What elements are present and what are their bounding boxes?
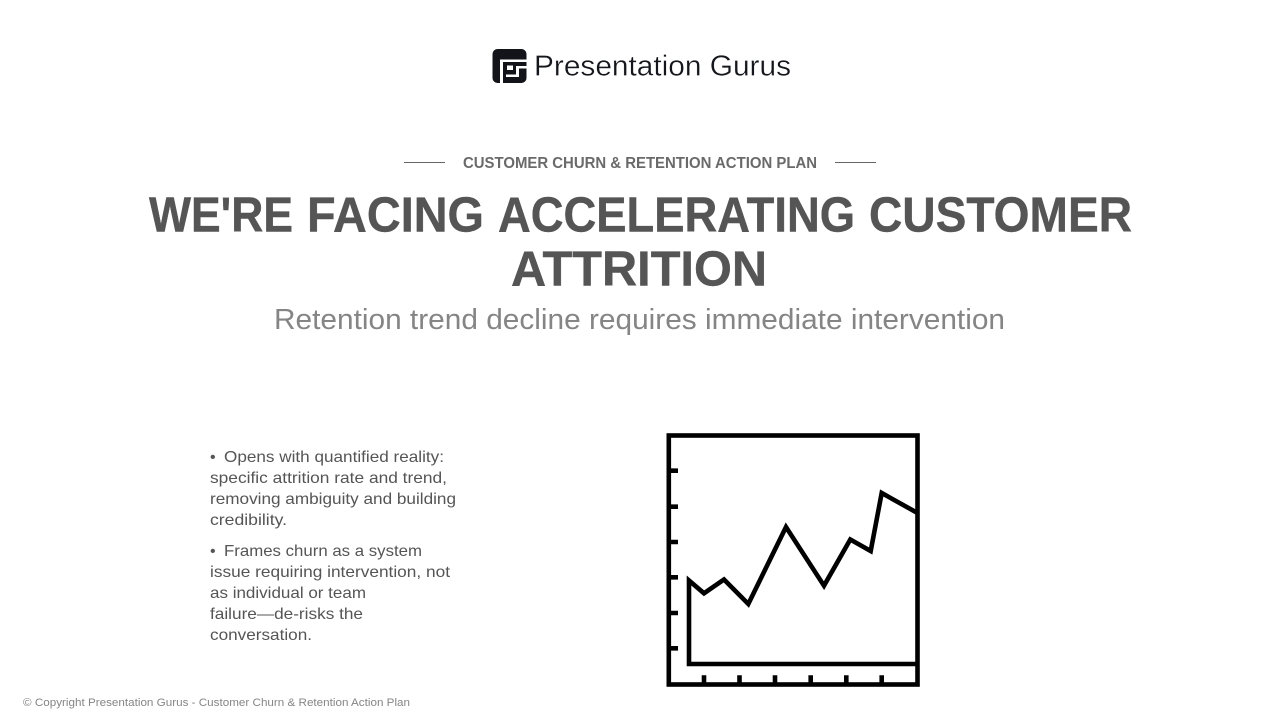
title: ATTRITION — [511, 242, 767, 296]
title: FACING — [307, 188, 484, 242]
bullet: system issue: conversation. — [210, 627, 312, 644]
bullet text block — [210, 449, 456, 644]
bullet: system issue: Frames churn as a system — [224, 543, 422, 560]
title: CUSTOMER — [869, 188, 1132, 242]
eyebrow heading with rules: CUSTOMER CHURN & RETENTION ACTION PLAN — [463, 155, 817, 172]
icon: logo mark — [492, 49, 527, 83]
subtitle: Retention trend decline requires immediate intervention — [274, 304, 1005, 336]
bullet: quantified reality: Opens with quantified reality: — [224, 449, 444, 466]
bullet: quantified reality: removing ambiguity and building — [210, 491, 456, 508]
title: ACCELERATING — [498, 188, 855, 242]
logo wordmark: Presentation Gurus — [534, 50, 791, 82]
bullet: quantified reality: • — [210, 449, 216, 466]
bullet: system issue: failure—de-risks the — [210, 606, 363, 623]
bullet: quantified reality: specific attrition rate and trend, — [210, 470, 447, 487]
bullet: system issue: as individual or team — [210, 585, 366, 602]
logo: Presentation Gurus — [492, 49, 791, 83]
bullet: system issue — [210, 543, 451, 644]
bullet: system issue: • — [210, 543, 216, 560]
icon: line chart — [669, 436, 918, 684]
bullet: quantified reality: credibility. — [210, 512, 287, 529]
footer copyright: © Copyright Presentation Gurus - Customer Churn & Retention Action Plan — [23, 697, 410, 709]
bullet: quantified reality — [210, 449, 456, 529]
bullet: system issue: issue requiring intervention, not — [210, 564, 451, 581]
title: WE'RE — [149, 188, 293, 242]
title — [149, 188, 1132, 296]
